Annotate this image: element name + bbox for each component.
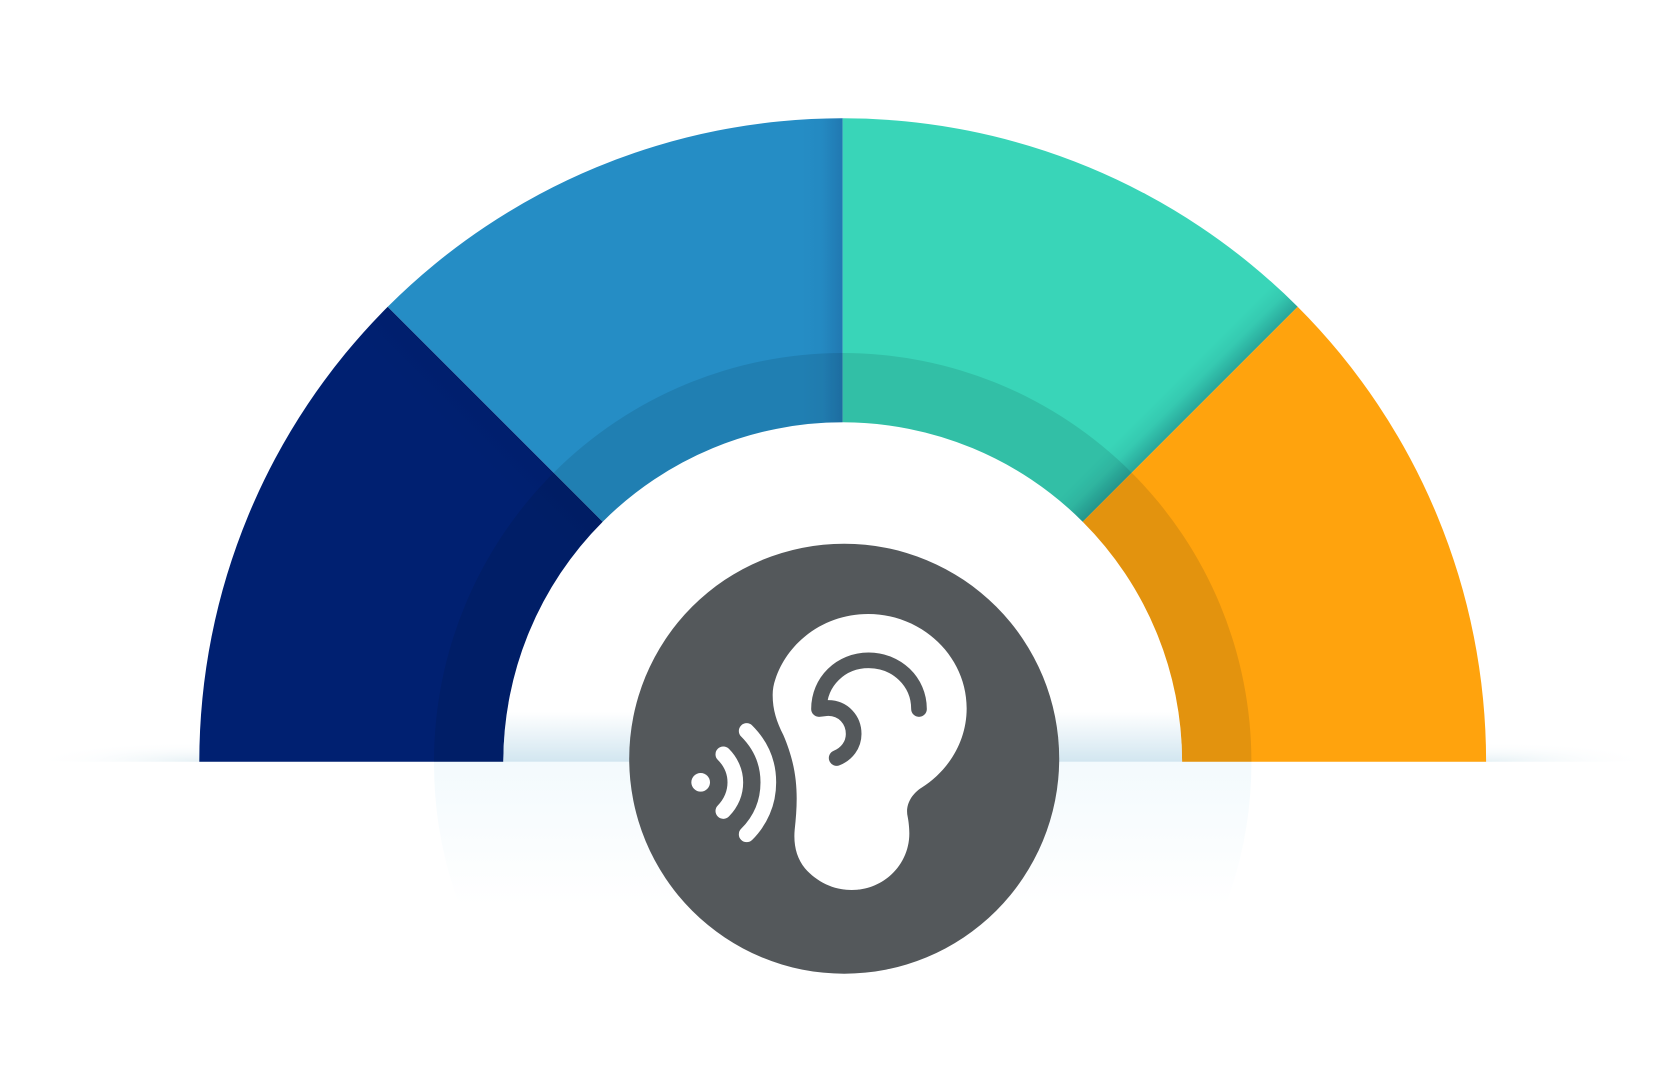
gauge segment: orange xyxy=(1083,307,1486,762)
gauge segment: navy xyxy=(199,306,603,762)
gauge segment: teal xyxy=(842,118,1298,522)
inner baseline shadow xyxy=(503,422,1182,762)
ear silhouette xyxy=(773,614,967,890)
icon: ear with sound waves xyxy=(691,614,967,890)
infographic: hearing gauge xyxy=(126,118,1558,974)
badge circle xyxy=(629,544,1059,974)
ear inner fold xyxy=(819,660,919,758)
floor reflection under gauge xyxy=(434,762,1251,912)
icon: ear badge xyxy=(629,544,1059,974)
right baseline glow xyxy=(1486,753,1558,762)
left baseline glow xyxy=(126,753,200,762)
sound wave small xyxy=(723,754,735,811)
sound wave large xyxy=(747,731,768,834)
sound dot xyxy=(691,773,710,792)
inner darker ring xyxy=(434,353,1251,762)
gauge segment: blue xyxy=(388,118,843,522)
